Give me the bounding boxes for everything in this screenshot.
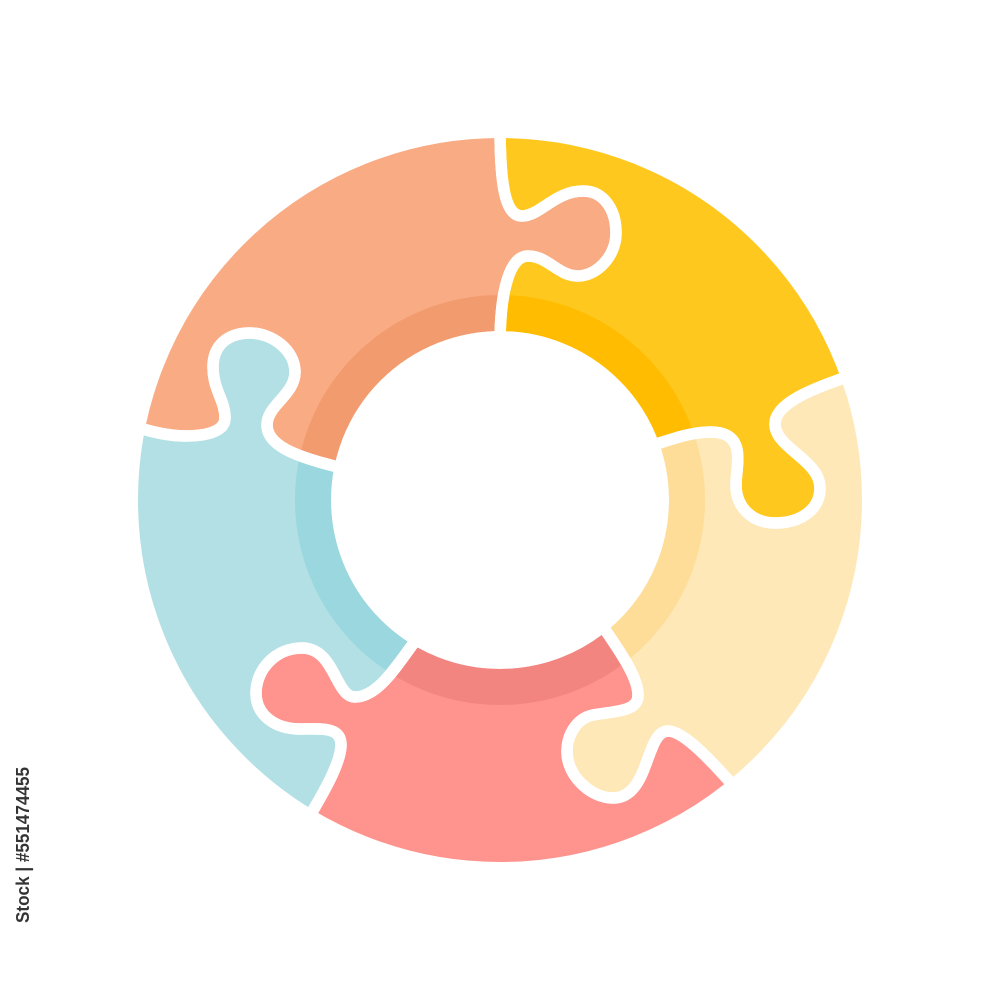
stock image id, vertical text: Stock | #551474455 [13, 767, 33, 923]
puzzle piece: yellow [506, 138, 840, 518]
puzzle ring diagram [16, 138, 862, 922]
puzzle piece: cream [572, 384, 862, 792]
puzzle piece: orange [146, 138, 610, 460]
puzzle piece: red [262, 635, 724, 862]
puzzle piece: blue [138, 338, 408, 807]
